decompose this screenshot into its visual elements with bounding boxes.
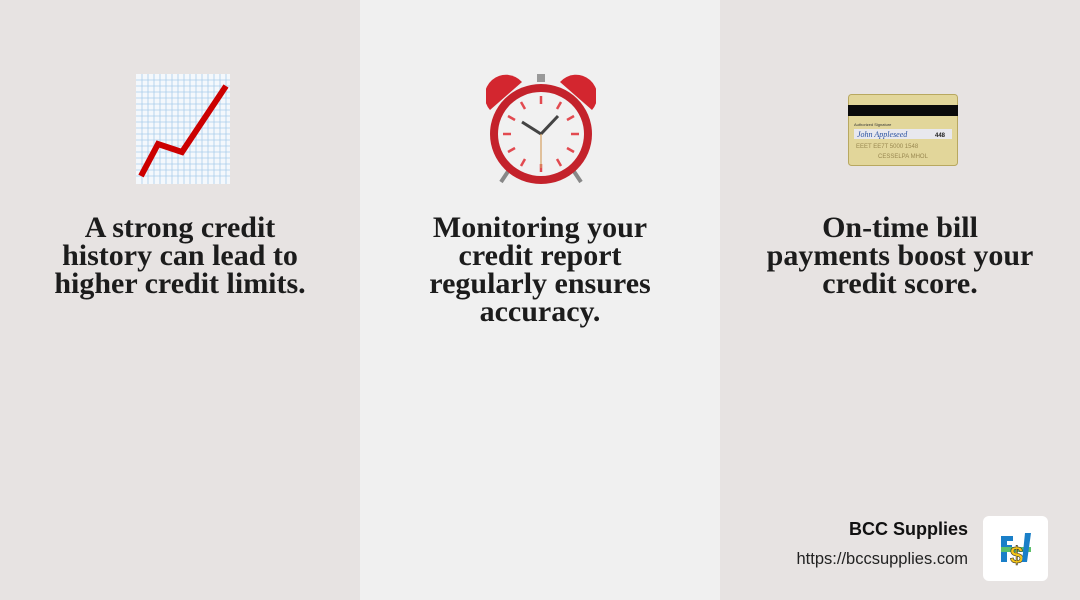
brand url: https://bccsupplies.com xyxy=(796,550,968,568)
icon: chart xyxy=(136,74,230,184)
text: monitoring: regularly ensures xyxy=(429,267,651,300)
text: credit history: higher credit limits. xyxy=(54,267,306,300)
icon: alarm clock xyxy=(486,74,596,184)
text: on-time payments: credit score. xyxy=(822,267,978,300)
text: monitoring xyxy=(429,211,651,328)
text: monitoring: Monitoring your xyxy=(433,211,647,244)
icon: credit card: CESSELPA MHOL xyxy=(878,154,929,160)
footer: brand xyxy=(796,516,1048,581)
logo xyxy=(983,516,1048,581)
text: credit history: history can lead to xyxy=(62,239,298,272)
icon: credit card: Authorized Signature xyxy=(854,122,892,127)
icon: credit card: John Appleseed xyxy=(857,130,908,139)
text: monitoring: credit report xyxy=(458,239,622,272)
text: on-time payments: On-time bill xyxy=(822,211,978,244)
brand name: BCC Supplies xyxy=(849,519,968,539)
panel: credit history xyxy=(0,0,360,600)
text: credit history: A strong credit xyxy=(85,211,275,244)
text: monitoring: accuracy. xyxy=(480,295,600,328)
logo: $ xyxy=(1010,542,1024,569)
icon: credit card: EEET EE7T 5000 1548 xyxy=(856,144,919,150)
panel: monitoring xyxy=(360,0,720,600)
text: credit history xyxy=(54,211,306,300)
panel: on-time payments xyxy=(720,0,1080,600)
icon: credit card xyxy=(848,94,958,166)
icon: credit card: 448 xyxy=(935,133,946,139)
text: on-time payments xyxy=(767,211,1033,300)
text: on-time payments: payments boost your xyxy=(767,239,1033,272)
